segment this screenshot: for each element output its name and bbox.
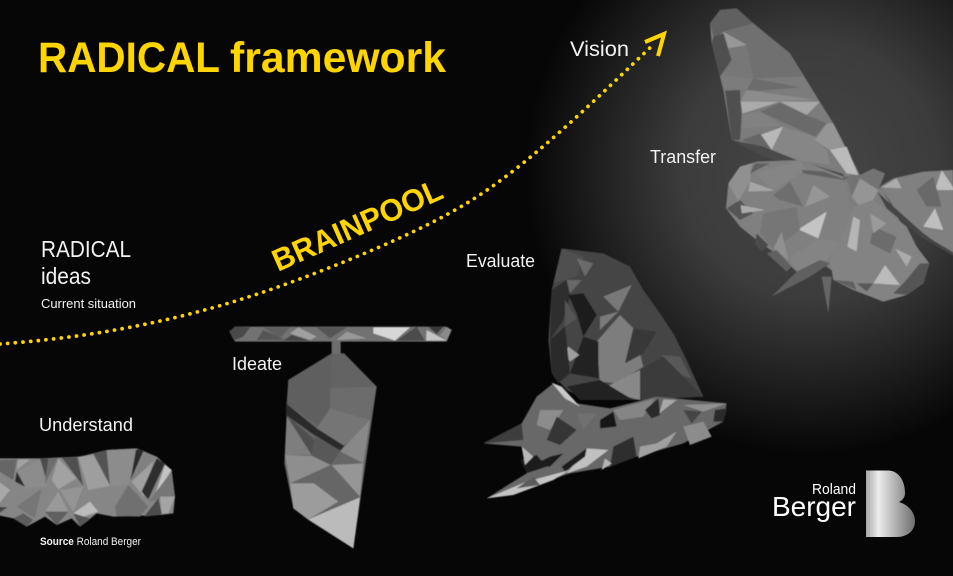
upper wing (710, 8, 860, 180)
arrow head (645, 34, 664, 56)
logo: Roland Berger: Berger (772, 491, 856, 522)
branch (229, 327, 452, 342)
label: Vision: Vision (570, 38, 629, 61)
text block: RADICAL ideas: ideas (41, 263, 91, 289)
icon: chrysalis (Ideate) (229, 327, 452, 548)
source note: Source Roland Berger (40, 536, 141, 548)
label: Transfer: Transfer (650, 147, 716, 167)
text block: RADICAL ideas: Current situation (41, 296, 136, 311)
lower body and wing (483, 383, 727, 498)
text block: RADICAL ideas: RADICAL (41, 236, 131, 262)
wing root underlay (820, 177, 907, 277)
icon: emerging moth (Evaluate) (483, 248, 727, 498)
title: RADICAL (38, 34, 220, 82)
label: Evaluate: Evaluate (466, 251, 535, 271)
tails (772, 260, 830, 297)
logo mark: chrome B (866, 470, 915, 537)
label: Ideate: Ideate (232, 354, 282, 374)
body (847, 168, 885, 207)
label: Understand: Understand (39, 415, 133, 435)
closed upper wing (548, 248, 703, 400)
label: BRAINPOOL: BRAINPOOL (267, 172, 448, 278)
text block: RADICAL ideas (41, 236, 136, 311)
stem (332, 341, 341, 354)
lower left wing (726, 160, 853, 272)
logo: Roland Berger: Roland (812, 481, 856, 498)
title (38, 34, 446, 82)
cocoon (284, 353, 377, 548)
lower right wing (830, 200, 929, 302)
dotted growth curve with arrow (0, 34, 664, 344)
icon: caterpillar (Understand) (0, 448, 175, 527)
title: framework (230, 34, 446, 82)
icon: butterfly (Transfer) (710, 8, 953, 313)
logo: Roland Berger (772, 470, 915, 537)
right wing (877, 170, 953, 257)
